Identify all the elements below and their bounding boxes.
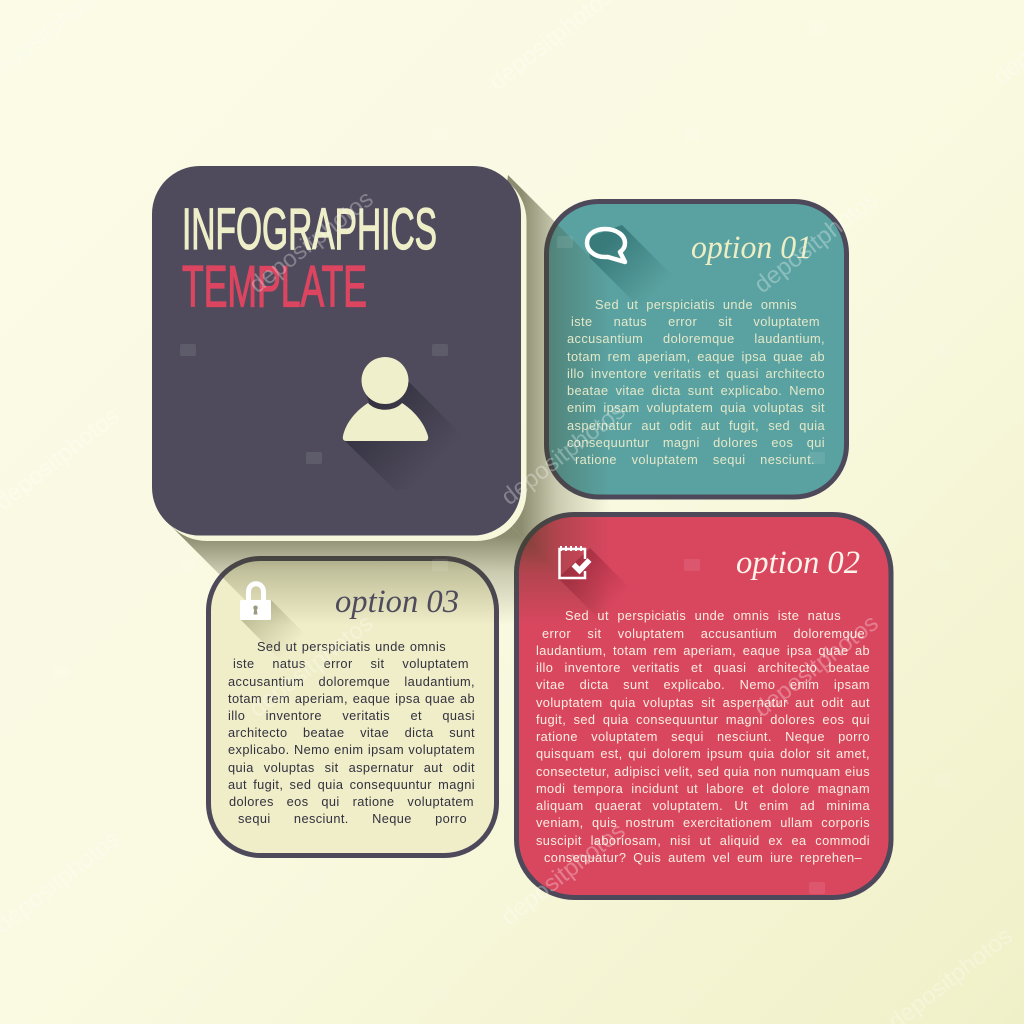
text block: option 02 body: quisquam est, qui dolorem ipsum quia dolor sit amet, [536,746,870,761]
title [182,197,437,320]
text block: option 02 body: consectetur, adipisci velit, sed quia non numquam eius [536,764,870,778]
text block: option 02 body: error sit voluptatem accusantium doloremque [542,626,865,640]
text block: option 01 body: Sed ut perspiciatis unde omnis [595,297,797,312]
panel: main title card [152,166,521,536]
icon: person with long shadow [343,357,478,490]
text block: option 02 body: illo inventore veritatis et quasi architecto beatae [536,660,870,675]
text block: option 03 body: accusantium doloremque laudantium, [228,674,475,688]
text block: option 02 body: aliquam quaerat voluptatem. Ut enim ad minima [536,798,870,813]
text block: option 02 body: Sed ut perspiciatis unde omnis iste natus [565,608,841,623]
text block: option 01 body: consequuntur magni dolores eos qui [567,435,825,450]
text block: option 02 body: fugit, sed quia consequuntur magni dolores eos qui [536,712,870,726]
panel: option 03 card [208,558,496,856]
text block: option 01 body: ratione voluptatem sequi nesciunt. [575,452,815,467]
text block: option 02 body: consequatur? Quis autem vel eum iure reprehen– [544,850,862,864]
watermark overlay: depositphotos [749,185,884,299]
text block: option 02 body: ratione voluptatem sequi nesciunt. Neque porro [536,729,870,744]
panel: option 02 card [516,514,891,898]
panel: main card cream edge [157,171,526,541]
text block: option 03 body: explicabo. Nemo enim ipsam voluptatem [228,742,475,757]
text block: option 01 body: accusantium doloremque laudantium, [567,331,825,346]
text block: option 02 body: modi tempora incidunt ut labore et dolore magnam [536,780,870,796]
panel: option 01 card [546,202,846,497]
text block: option 01 body: aspernatur aut odit aut fugit, sed quia [567,418,825,432]
text block: option 02 body: suscipit laboriosam, nisi ut aliquid ex ea commodi [536,832,870,848]
watermark overlay: depositphotos [496,817,631,931]
text block: option 01 body: totam rem aperiam, eaque ipsa quae ab [567,348,825,364]
icon: checklist note with long shadow [558,546,660,650]
text block: option 01 body: beatae vitae dicta sunt explicabo. Nemo [567,383,825,398]
heading: option 01: option 01 [691,230,812,266]
title: INFOGRAPHICS [182,197,437,262]
watermark overlay: depositphotos [496,397,631,511]
text block: option 03 body: totam rem aperiam, eaque ipsa quae ab [228,690,475,706]
long shadow of main card, bottom side [168,485,610,625]
text block: option 03 body: quia voluptas sit aspernatur aut odit [228,760,475,774]
text block: option 03 body: architecto beatae vitae dicta sunt [228,725,475,740]
long shadow of main card, right side [470,175,610,625]
text block: option 02 body: laudantium, totam rem aperiam, eaque ipsa quae ab [536,642,870,658]
text block: option 03 body: dolores eos qui ratione voluptatem [229,794,474,809]
icon: padlock with long shadow [240,584,340,680]
text block: option 02 body: veniam, quis nostrum exercitationem ullam corporis [536,815,870,830]
heading: option 03: option 03 [335,584,459,620]
text block: option 01 body: enim ipsam voluptatem quia voluptas sit [567,400,825,415]
watermark overlay: depositphotos [749,609,884,723]
subtitle: TEMPLATE [182,254,367,320]
watermark overlay: depositphotos [244,185,379,299]
text block: option 02 body: voluptatem quia voluptas sit aspernatur aut odit aut [536,694,870,710]
text block: option 03 body: sequi nesciunt. Neque porro [238,811,467,826]
watermark overlay: depositphotos [244,609,379,723]
text block: option 02 body: vitae dicta sunt explicabo. Nemo enim ipsam [536,677,870,692]
heading: option 02: option 02 [736,545,860,581]
text block: option 03 body: iste natus error sit voluptatem [233,656,469,671]
text block: option 03 body: Sed ut perspiciatis unde omnis [257,639,446,654]
icon: speech bubble with long shadow [586,225,705,318]
text block: option 03 body: illo inventore veritatis et quasi [228,708,475,723]
text block: option 01 body: illo inventore veritatis et quasi architecto [567,366,825,381]
text block: option 01 body: iste natus error sit voluptatem [571,314,820,329]
text block: option 03 body: aut fugit, sed quia consequuntur magni [228,776,475,792]
